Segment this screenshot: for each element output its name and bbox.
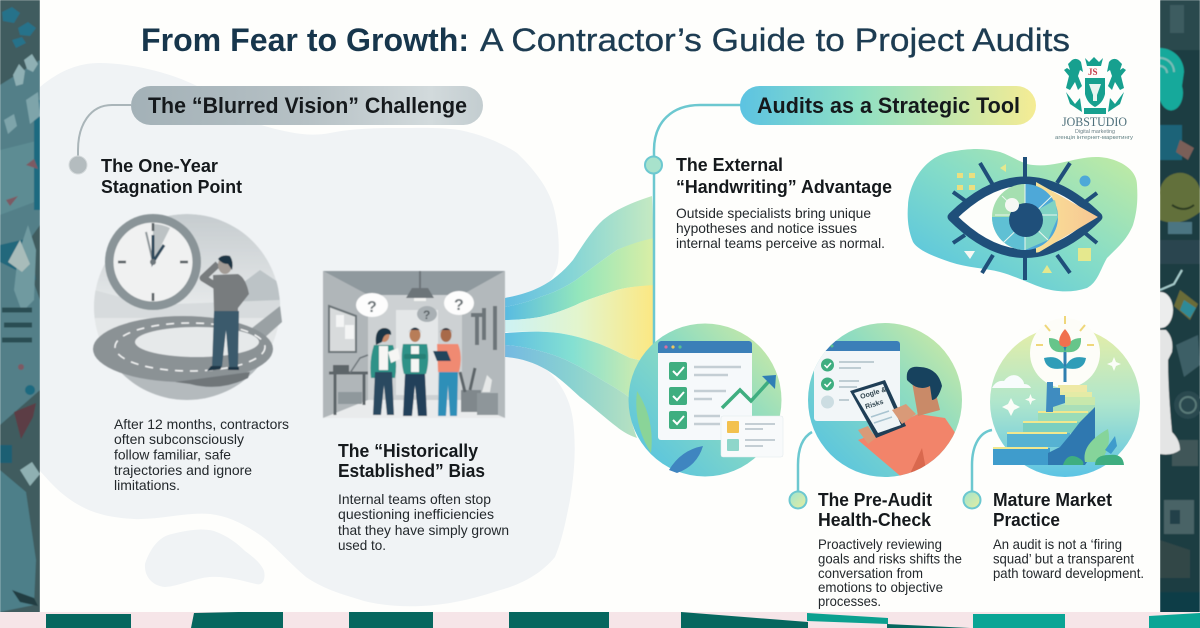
thought bubbles: ? — [423, 308, 430, 322]
text: External Handwriting body copy: internal teams perceive as normal. — [676, 235, 885, 251]
block: Mature Market Practice heading: Mature Market — [993, 490, 1112, 510]
thought bubbles: ? — [454, 297, 464, 314]
illustration: audit checklist and chart — [628, 324, 783, 476]
person: woman in teal jacket — [370, 328, 400, 415]
block: Pre-Audit Health-Check heading: Health-Check — [818, 510, 932, 530]
block: One-Year Stagnation Point heading: The One-Year — [101, 156, 218, 176]
block: Mature Market Practice heading — [993, 490, 1112, 530]
text: Historically Established body copy: used to. — [338, 537, 386, 553]
block: One-Year Stagnation Point heading — [101, 156, 242, 197]
text: One-Year body copy: limitations. — [114, 477, 180, 493]
title: From Fear to Growth: — [141, 22, 469, 58]
logo: JobStudio crest: JOBSTUDIO — [1062, 115, 1127, 129]
icon: white 3D figure — [1149, 292, 1180, 454]
block: External Handwriting heading: “Handwriting” Advantage — [676, 177, 892, 197]
block: Pre-Audit Health-Check heading — [818, 490, 932, 530]
block: One-Year Stagnation Point heading: Stagnation Point — [101, 177, 242, 197]
person: man in coral shirt with tablet — [433, 328, 461, 416]
illustration: man reviewing tablet — [808, 323, 962, 480]
text: Pre-Audit body copy — [818, 536, 962, 609]
illustration: staircase and growing plant — [990, 316, 1140, 477]
icon: man looking at horizon — [203, 255, 249, 371]
text: Historically Established body copy: that they have simply grown — [338, 522, 509, 538]
icon: clock — [105, 214, 201, 310]
plants at the stair base — [1063, 429, 1124, 465]
left doodle background strip — [0, 0, 40, 628]
flowing gradient ribbons — [505, 196, 654, 438]
logo: JobStudio crest: Digital marketing — [1075, 129, 1115, 135]
text: External Handwriting body copy: Outside specialists bring unique — [676, 205, 871, 221]
icon: tablet with audit notes: Risks — [865, 399, 885, 411]
staircase — [993, 382, 1095, 465]
block: Historically Established Bias heading: Established” Bias — [338, 461, 485, 481]
right doodle background strip — [1149, 0, 1200, 628]
illustration: stylised eye — [908, 149, 1137, 291]
arrow: rising trend — [722, 375, 776, 408]
logo: JobStudio crest: агенція інтернет-маркетингу — [1055, 135, 1134, 141]
text: Pre-Audit body copy: Proactively reviewing — [818, 536, 942, 552]
block: External Handwriting heading: The External — [676, 155, 783, 175]
illustration: team in workshop room — [323, 271, 505, 418]
text: Pre-Audit body copy: conversation from — [818, 565, 923, 581]
text: Mature Market body copy — [993, 536, 1144, 581]
text: External Handwriting body copy — [676, 205, 885, 251]
logo: JobStudio crest — [1055, 57, 1134, 141]
text: Pre-Audit body copy: emotions to objective — [818, 579, 943, 595]
person: man with crossed arms — [402, 328, 428, 416]
block: Mature Market Practice heading: Practice — [993, 510, 1060, 530]
text: Historically Established body copy: questioning inefficiencies — [338, 506, 494, 522]
person: orange sweater — [858, 367, 960, 480]
icon: tablet with audit notes — [850, 380, 916, 444]
block: Pre-Audit Health-Check heading: The Pre-Audit — [818, 490, 932, 510]
icon: plant with flower and rays — [1036, 316, 1094, 382]
text: Mature Market body copy: An audit is not a ‘firing — [993, 536, 1122, 552]
text: One-Year body copy: often subconsciously — [114, 431, 244, 447]
text: Mature Market body copy: path toward development. — [993, 565, 1144, 581]
title — [141, 22, 1070, 58]
text: Mature Market body copy: squad’ but a transparent — [993, 550, 1134, 566]
connector: Pre-Audit line and dot — [790, 432, 812, 508]
grey blob background — [40, 63, 575, 606]
panel: Strategic tool heading pill: Audits as a Strategic Tool — [757, 93, 1020, 118]
block: Historically Established Bias heading: The “Historically — [338, 441, 478, 461]
text: One-Year body copy: trajectories and ignore — [114, 462, 252, 478]
logo: JobStudio crest: JS — [1088, 67, 1098, 77]
text: Historically Established body copy: Internal teams often stop — [338, 491, 491, 507]
icon: teal wifi badge on strip — [1160, 48, 1184, 110]
panel: Blurred Vision challenge heading pill: The “Blurred Vision” Challenge — [148, 93, 467, 118]
panel: Blurred Vision challenge heading pill — [69, 86, 483, 174]
text: Pre-Audit body copy: processes. — [818, 593, 881, 609]
bottom checker strip — [0, 611, 1200, 628]
title: A Contractor’s Guide to Project Audits — [480, 22, 1070, 58]
block: Historically Established Bias heading — [338, 441, 485, 481]
thought bubbles — [356, 291, 474, 322]
connector: Mature Market line and dot — [964, 430, 992, 508]
text: External Handwriting body copy: hypotheses and notice issues — [676, 220, 857, 236]
text: One-Year body copy: After 12 months, contractors — [114, 416, 289, 432]
icon: tablet with audit notes: Oogle & — [860, 386, 887, 401]
text: Historically Established body copy — [338, 491, 509, 553]
text: One-Year body copy — [114, 416, 289, 493]
checklist items — [669, 362, 741, 429]
block: External Handwriting heading — [676, 155, 892, 197]
illustration: clock, man and looping road — [93, 214, 290, 408]
text: Pre-Audit body copy: goals and risks shifts the — [818, 550, 962, 566]
thought bubbles: ? — [367, 299, 377, 316]
panel: Strategic tool heading pill — [645, 86, 1036, 345]
text: One-Year body copy: follow familiar, safe — [114, 446, 231, 462]
